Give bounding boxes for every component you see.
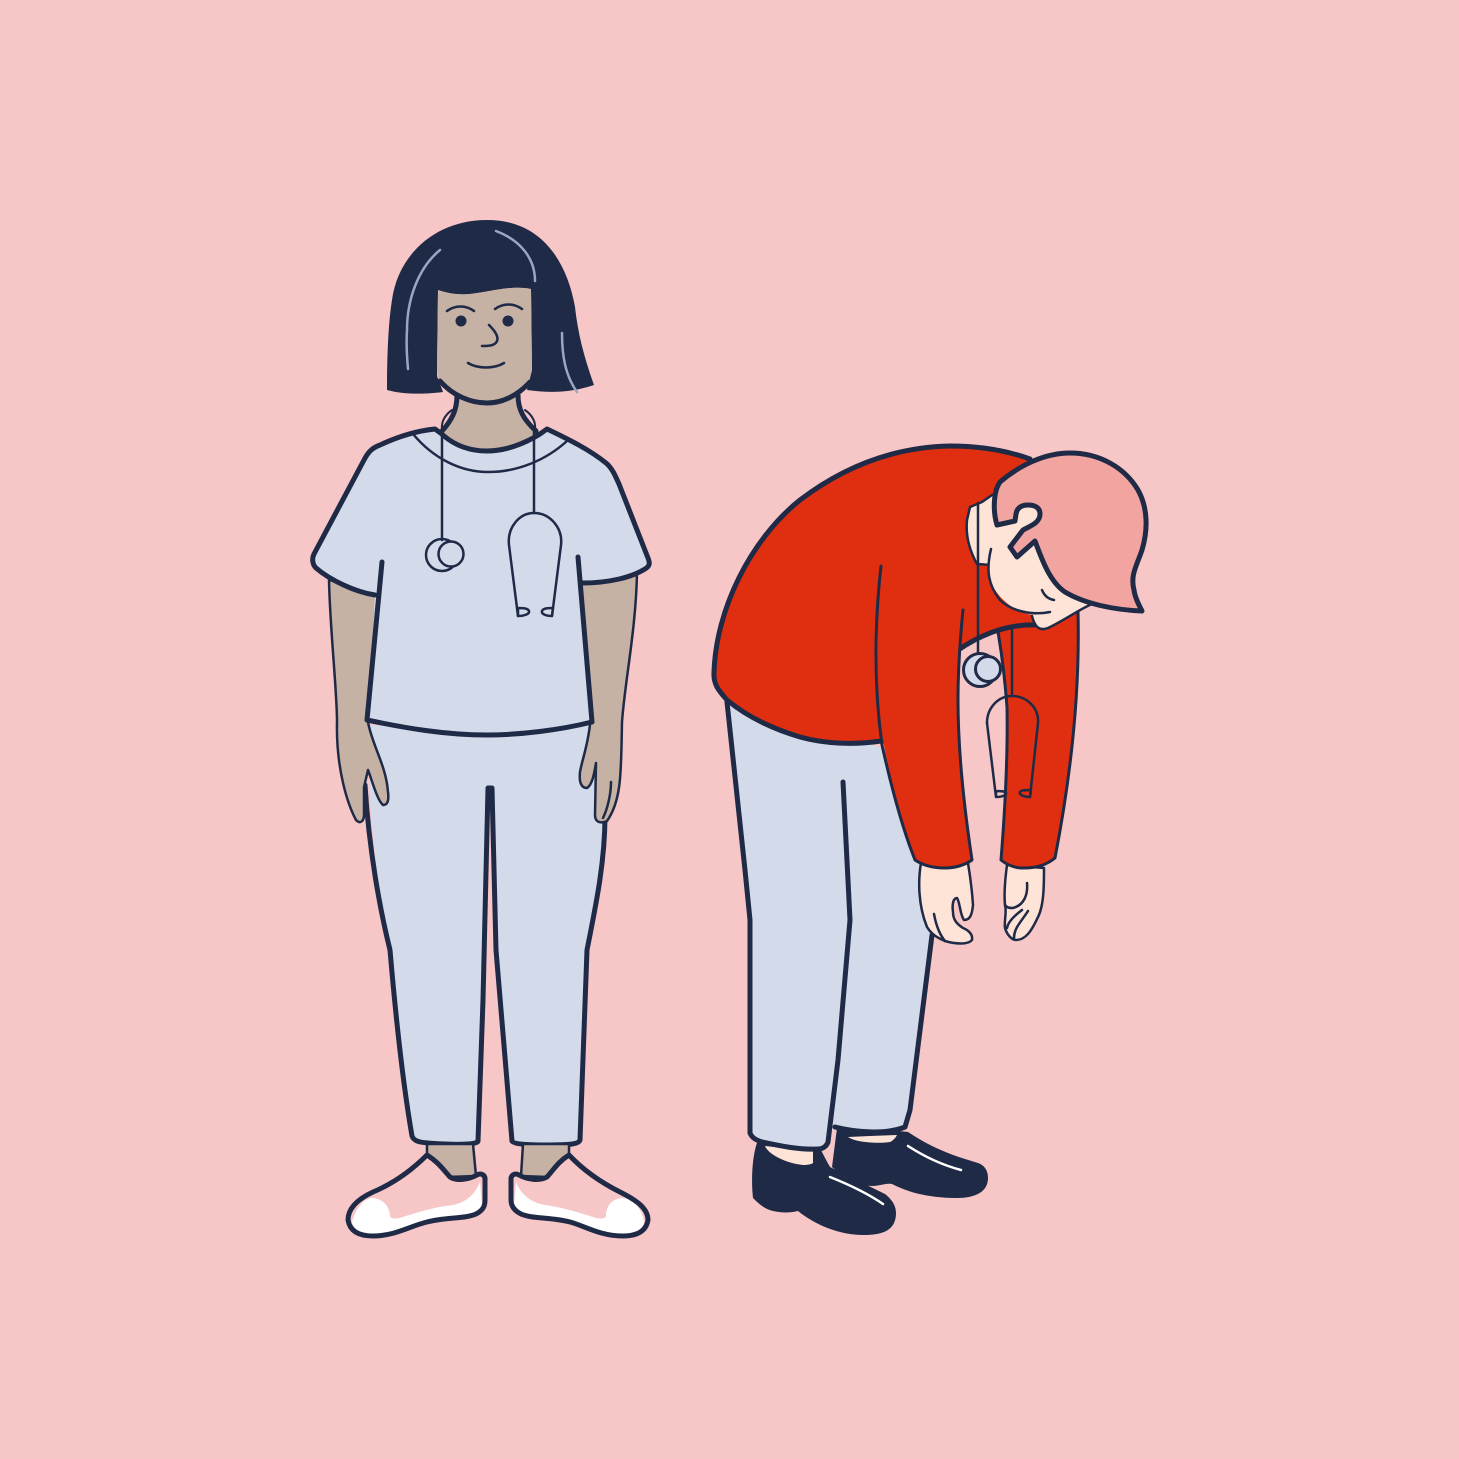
man: far hand <box>1005 865 1044 940</box>
woman: neck <box>440 393 540 465</box>
woman: left arm <box>329 580 388 822</box>
woman: face <box>437 288 532 403</box>
man: far arm <box>998 612 1078 868</box>
woman: ankles <box>427 1144 569 1177</box>
man: stethoscope tube <box>987 612 1038 797</box>
woman: right arm <box>578 572 637 822</box>
woman: hair <box>387 220 594 394</box>
woman: stethoscope <box>426 432 561 616</box>
man: stethoscope chest piece <box>964 503 1000 686</box>
man: neck <box>967 495 1005 566</box>
figure: standing woman <box>313 220 649 1236</box>
man: torso in red sweater <box>714 446 1040 860</box>
man: face <box>988 505 1092 629</box>
man: near arm <box>876 500 972 868</box>
woman: trousers <box>365 722 605 1145</box>
man: near hand <box>919 863 973 944</box>
woman: left sneaker <box>348 1155 485 1236</box>
figure: exhausted man bent over <box>714 446 1146 1235</box>
man: hair <box>994 453 1146 611</box>
woman: stethoscope loop behind neck <box>442 410 535 430</box>
man: trousers <box>727 702 935 1149</box>
woman: t-shirt <box>313 429 649 735</box>
man: back leg shoe <box>832 1128 988 1198</box>
woman: right sneaker <box>511 1155 648 1236</box>
man: front leg shoe <box>752 1140 896 1235</box>
